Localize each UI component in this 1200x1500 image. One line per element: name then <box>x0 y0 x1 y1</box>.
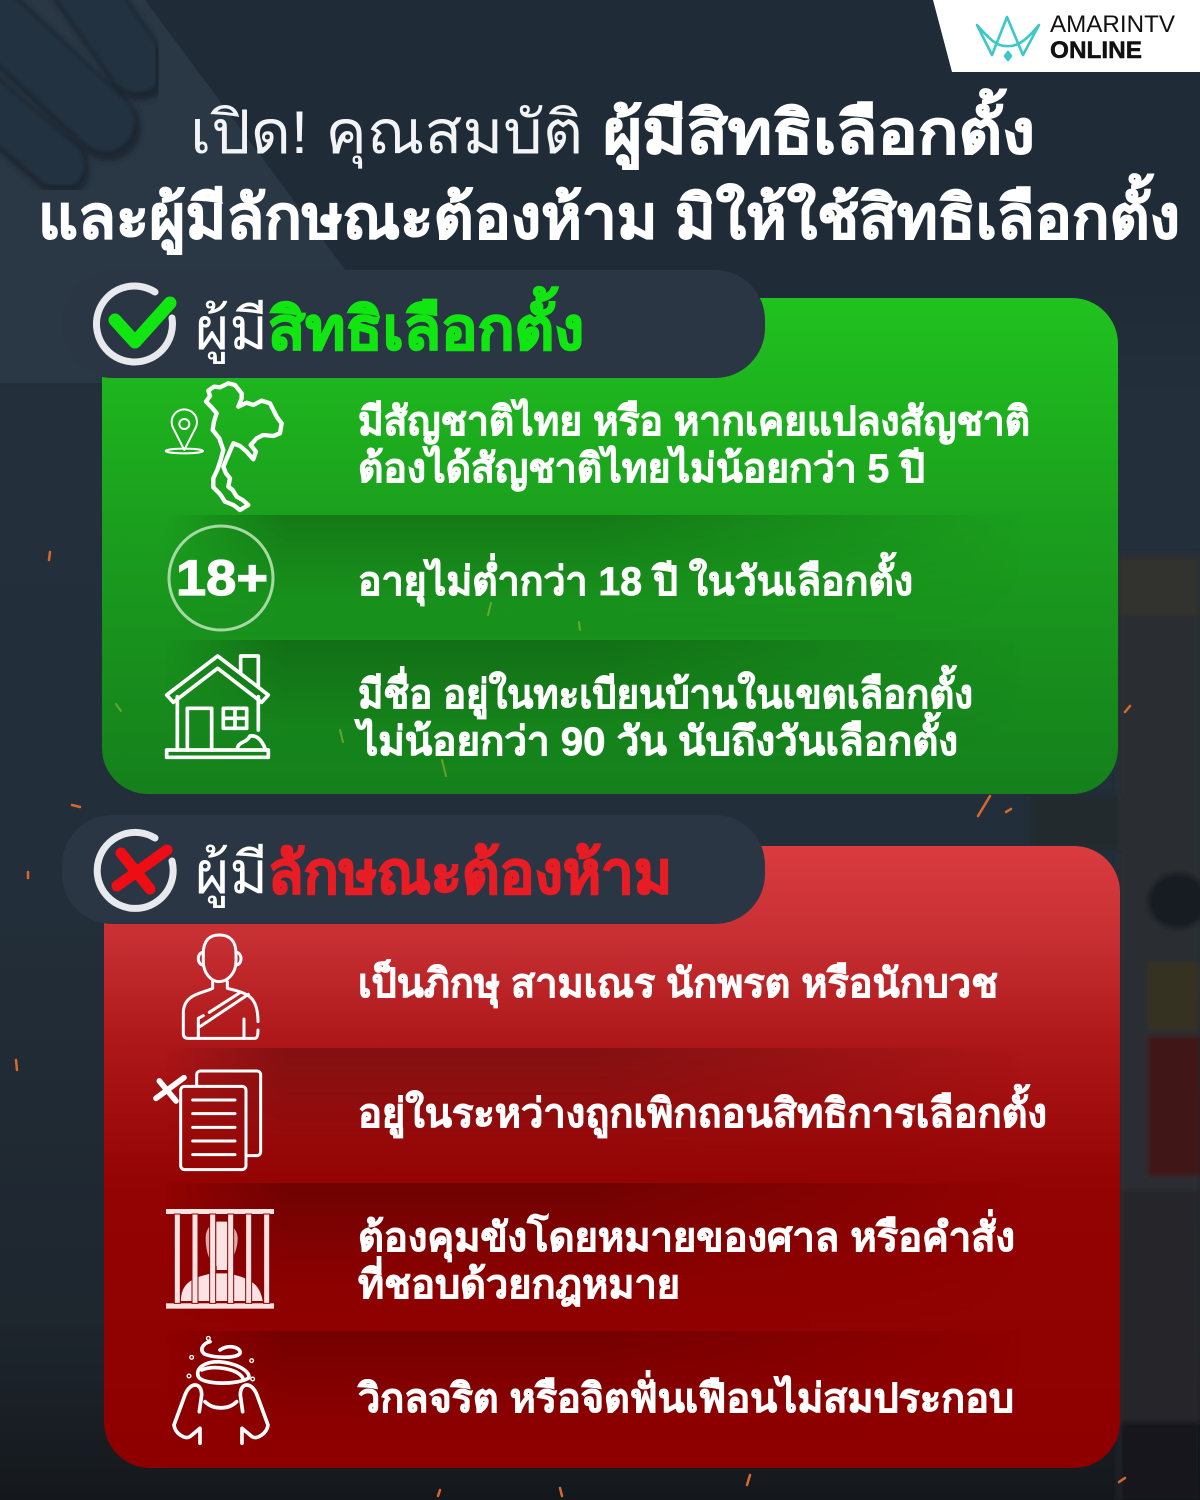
icon: prisoner behind bars <box>166 1209 274 1309</box>
logo wordmark: AMARINTV <box>1050 11 1175 38</box>
icon: 18 plus: 18+ <box>176 550 268 606</box>
heading pill: eligible <box>62 270 765 378</box>
row: residence: ไม่น้อยกว่า 90 วัน นับถึงวันเลือกตั้ง <box>354 712 958 764</box>
row: nationality <box>358 398 1030 492</box>
row: detained <box>358 1209 1015 1307</box>
row: revoked rights: อยู่ในระหว่างถูกเพิกถอนสิทธิการเลือกตั้ง <box>358 1084 1047 1138</box>
logo wordmark <box>1050 11 1175 64</box>
icon: check mark <box>96 286 172 362</box>
icon: 18 plus <box>169 526 273 630</box>
icon: house <box>167 656 268 757</box>
logo badge <box>933 0 1200 72</box>
row: nationality: ต้องได้สัญชาติไทยไม่น้อยกว่า 5 ปี <box>358 445 925 492</box>
heading pill: prohibited <box>62 815 765 924</box>
title: เปิด! คุณสมบัติ <box>190 99 583 169</box>
heading text: ผู้มี <box>195 297 268 364</box>
row: detained: ที่ชอบด้วยกฎหมาย <box>358 1256 680 1307</box>
row: residence: มีชื่อ อยู่ในทะเบียนบ้านในเขตเลือกตั้ง <box>358 665 973 719</box>
row: nationality: มีสัญชาติไทย หรือ หากเคยแปลงสัญชาติ <box>358 398 1030 445</box>
sparks <box>16 552 1130 1496</box>
title: ผู้มีสิทธิเลือกตั้ง <box>603 88 1035 170</box>
panel: eligible voters <box>62 270 1118 794</box>
title: และผู้มีลักษณะต้องห้าม มิให้ใช้สิทธิเลือกตั้ง <box>38 173 1180 255</box>
row: age: อายุไม่ต่ำกว่า 18 ปี ในวันเลือกตั้ง <box>358 552 913 607</box>
row: detained: ต้องคุมขังโดยหมายของศาล หรือคำสั่ง <box>358 1209 1015 1263</box>
title <box>38 88 1180 255</box>
icon: cross mark <box>97 832 173 908</box>
row: mental condition: วิกลจริต หรือจิตฟั่นเฟือนไม่สมประกอบ <box>357 1370 1014 1421</box>
panel: prohibited <box>62 815 1120 1468</box>
heading pill: prohibited: ลักษณะต้องห้าม <box>268 841 672 906</box>
logo wordmark: ONLINE <box>1050 37 1142 64</box>
row: clergy: เป็นภิกษุ สามเณร นักพรต หรือนักบวช <box>358 958 998 1009</box>
icon: dizzy person <box>174 1338 268 1443</box>
icon: revoked documents <box>156 1071 261 1170</box>
heading text: ผู้มี <box>195 841 268 908</box>
heading pill: eligible: สิทธิเลือกตั้ง <box>268 287 584 362</box>
icon: Thailand map with pin <box>166 383 282 510</box>
row: residence <box>354 665 973 764</box>
icon: monk <box>183 935 258 1038</box>
icon: crown logo <box>977 17 1039 60</box>
